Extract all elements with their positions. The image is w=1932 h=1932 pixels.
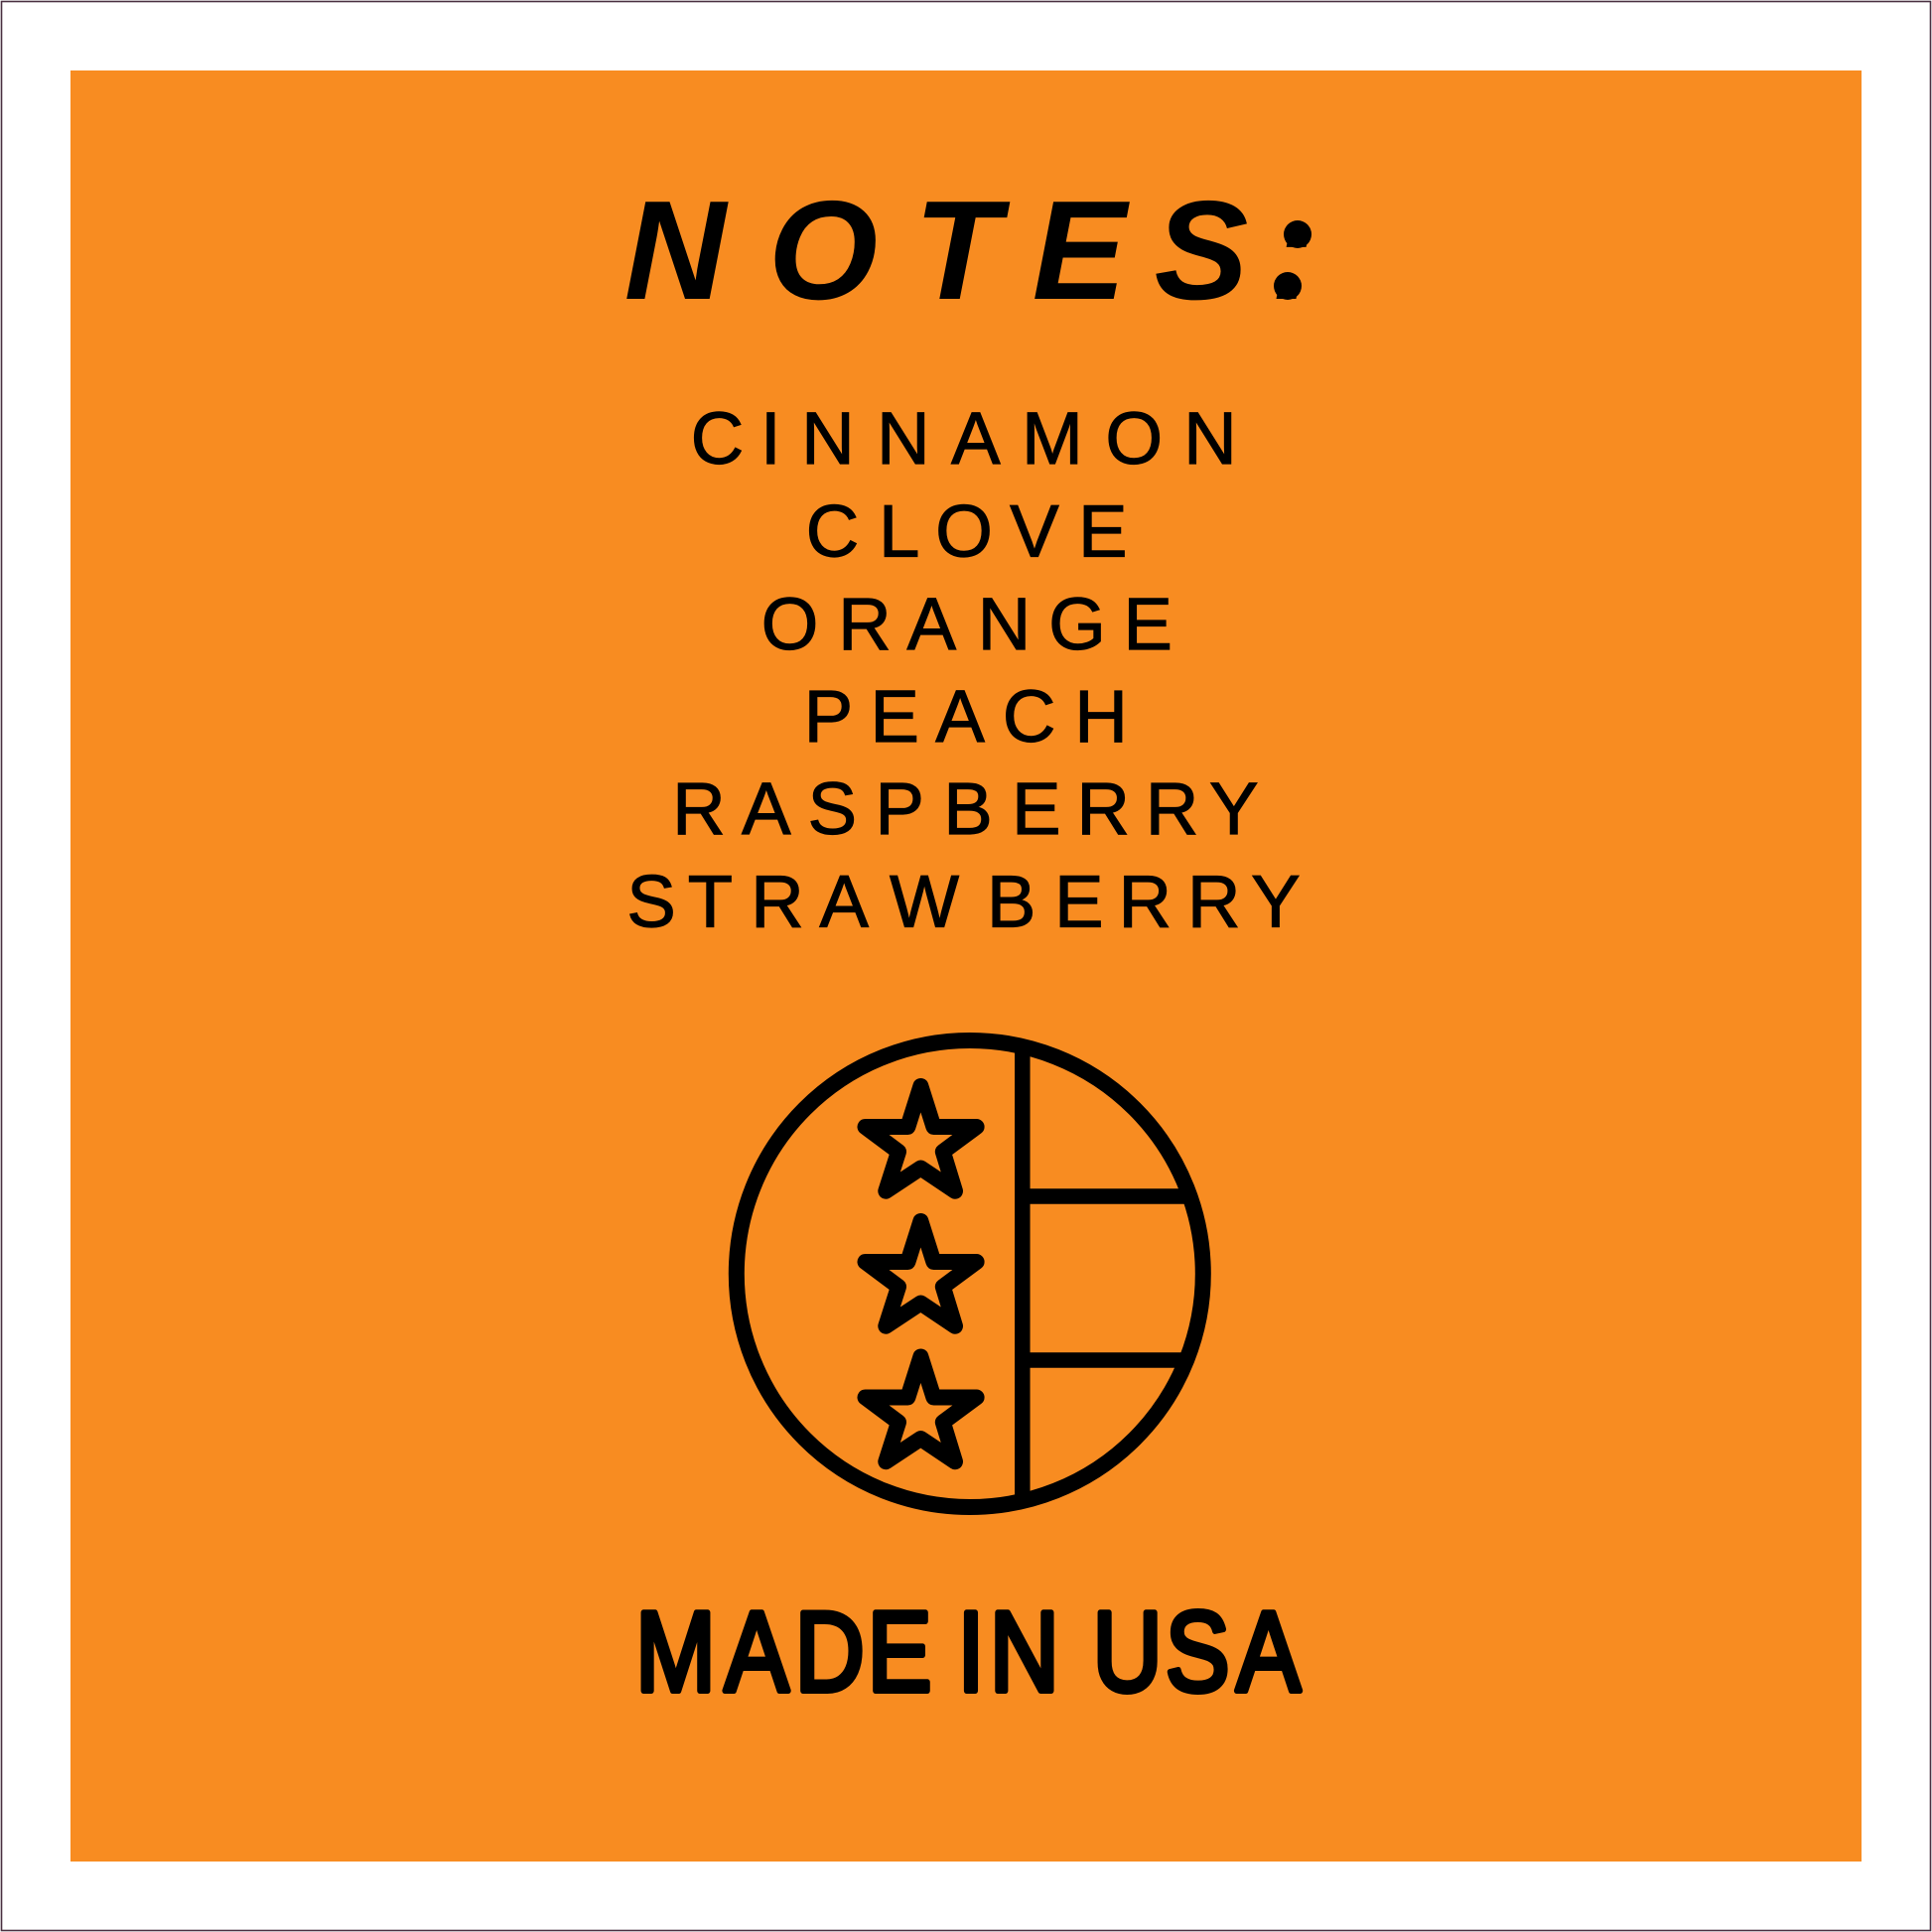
star: top [866,1086,977,1191]
text block: list of scent notes [626,397,1301,943]
note: clove: CLOVE [806,490,1127,573]
note: peach: PEACH [804,675,1128,758]
flag circle outline [737,1040,1203,1507]
icon: round flag with three stars [737,1023,1216,1519]
star: bottom [866,1356,977,1461]
title: NOTES: NOTES: [624,172,1317,330]
footer: made in USA: MADE IN USA [635,1589,1301,1716]
note: orange: ORANGE [761,583,1173,665]
note: raspberry: RASPBERRY [672,767,1258,850]
note: cinnamon: CINNAMON [691,397,1237,480]
star: middle [866,1221,977,1326]
flag stripes [1015,1052,1184,1495]
note: strawberry: STRAWBERRY [626,861,1301,943]
